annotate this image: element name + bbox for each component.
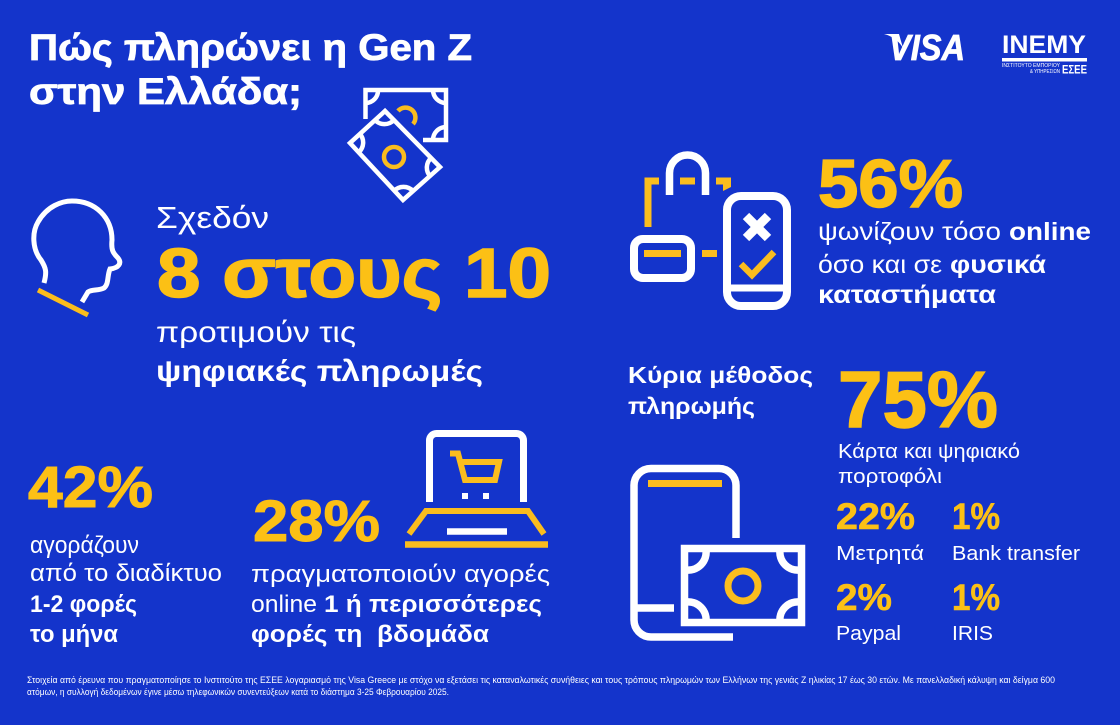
stat: 75%: 75% — [838, 355, 998, 444]
stat: 1% bank transfer — [952, 496, 1080, 565]
stat: 75%: Κάρτα και ψηφιακό — [838, 441, 1020, 463]
stat: 22% cash — [836, 496, 924, 565]
logo: INEMY ΕΣΕΕ: ΙΝΣΤΙΤΟΥΤΟ ΕΜΠΟΡΙΟΥ — [1002, 63, 1061, 69]
icon: phone and banknote — [634, 468, 802, 637]
stat: 75%: πορτοφόλι — [838, 466, 942, 488]
text block: 8 στους 10: ψηφιακές πληρωμές — [156, 355, 483, 388]
stat: 56%: καταστήματα — [818, 281, 997, 309]
stat: 2% Paypal — [836, 577, 901, 645]
stat: 28%: 28% — [253, 489, 380, 554]
logo: Visa: VISA — [889, 27, 965, 68]
footnote: ατόμων, η συλλογή δεδομένων έγινε μέσω τηλεφωνικών συνεντεύξεων κατά το διάστημα 3-25 Φεβρουαρίου 2025. — [27, 687, 449, 698]
text block: 8 στους 10: Σχεδόν — [156, 200, 269, 235]
title: Πώς πληρώνει η Gen Z — [29, 27, 472, 68]
stat: 42%: 1-2 φορές — [30, 591, 137, 618]
stat: 1% bank transfer: 1% — [952, 496, 1000, 537]
stat: 22% cash: 22% — [836, 496, 915, 537]
footnote — [27, 675, 1055, 698]
heading: main payment method: πληρωμής — [628, 393, 755, 419]
stat: 56%: φυσικά — [950, 251, 1047, 279]
stat: 1% IRIS: 1% — [952, 577, 1000, 618]
title: στην Ελλάδα; — [29, 71, 302, 112]
logo: INEMY ΕΣΕΕ: INEMY — [1002, 31, 1086, 59]
stat: 22% cash: Μετρητά — [836, 543, 924, 565]
heading: main payment method — [628, 362, 813, 419]
stat: 42%: από το διαδίκτυο — [30, 560, 222, 587]
title — [29, 27, 472, 112]
stat: 42%: αγοράζουν — [30, 532, 139, 559]
stat: 56%: 56% — [818, 146, 963, 222]
stat: 42%: το μήνα — [30, 621, 118, 648]
heading: main payment method: Κύρια μέθοδος — [628, 362, 813, 388]
stat: 1% IRIS: IRIS — [952, 623, 993, 645]
stat: 2% Paypal: 2% — [836, 577, 892, 618]
stat: 56% — [818, 146, 1091, 309]
stat: 56%: online — [1009, 218, 1091, 246]
stat: 1% bank transfer: Bank transfer — [952, 543, 1080, 565]
logo: INEMY ΕΣΕΕ — [1002, 31, 1087, 76]
stat: 2% Paypal: Paypal — [836, 623, 901, 645]
logo: INEMY ΕΣΕΕ: ΕΣΕΕ — [1062, 64, 1087, 76]
stat: 56%: όσο και σε — [818, 251, 942, 279]
stat: 28%: online — [251, 591, 317, 618]
stat: 42% — [28, 455, 222, 648]
stat: 1% IRIS — [952, 577, 1000, 645]
stat: 28%: πραγματοποιούν αγορές — [251, 561, 550, 588]
icon: banknotes — [350, 90, 446, 200]
icon: laptop with cart — [405, 433, 548, 544]
stat: 28% — [251, 489, 550, 648]
text block: 8 στους 10: προτιμούν τις — [156, 316, 356, 349]
text block: 8 στους 10 — [156, 200, 551, 388]
stat: 56%: ψωνίζουν τόσο — [818, 218, 1001, 246]
footnote: Στοιχεία από έρευνα που πραγματοποίησε το Ινστιτούτο της ΕΣΕΕ λογαριασμό της Visa Greece με στόχο να εξετάσει τις καταναλωτικές συνήθειες και τους τρόπους πληρωμών των Ελλήνων της γενιάς Ζ ηλικίας 17 έως 30 ετών. Με πανελλαδική κάλυψη και δείγμα 600 — [27, 675, 1055, 686]
logo: INEMY ΕΣΕΕ: & ΥΠΗΡΕΣΙΩΝ — [1030, 69, 1060, 75]
text block: 8 στους 10: 8 στους 10 — [157, 234, 551, 312]
stat: 42%: 42% — [28, 455, 153, 520]
stat: 28%: φορές τη βδομάδα — [251, 621, 489, 648]
stat: 28%: 1 ή περισσότερες — [324, 591, 542, 618]
icon: bag, card and phone — [634, 155, 787, 306]
stat: 75% — [838, 355, 1020, 488]
icon: head — [34, 201, 120, 315]
